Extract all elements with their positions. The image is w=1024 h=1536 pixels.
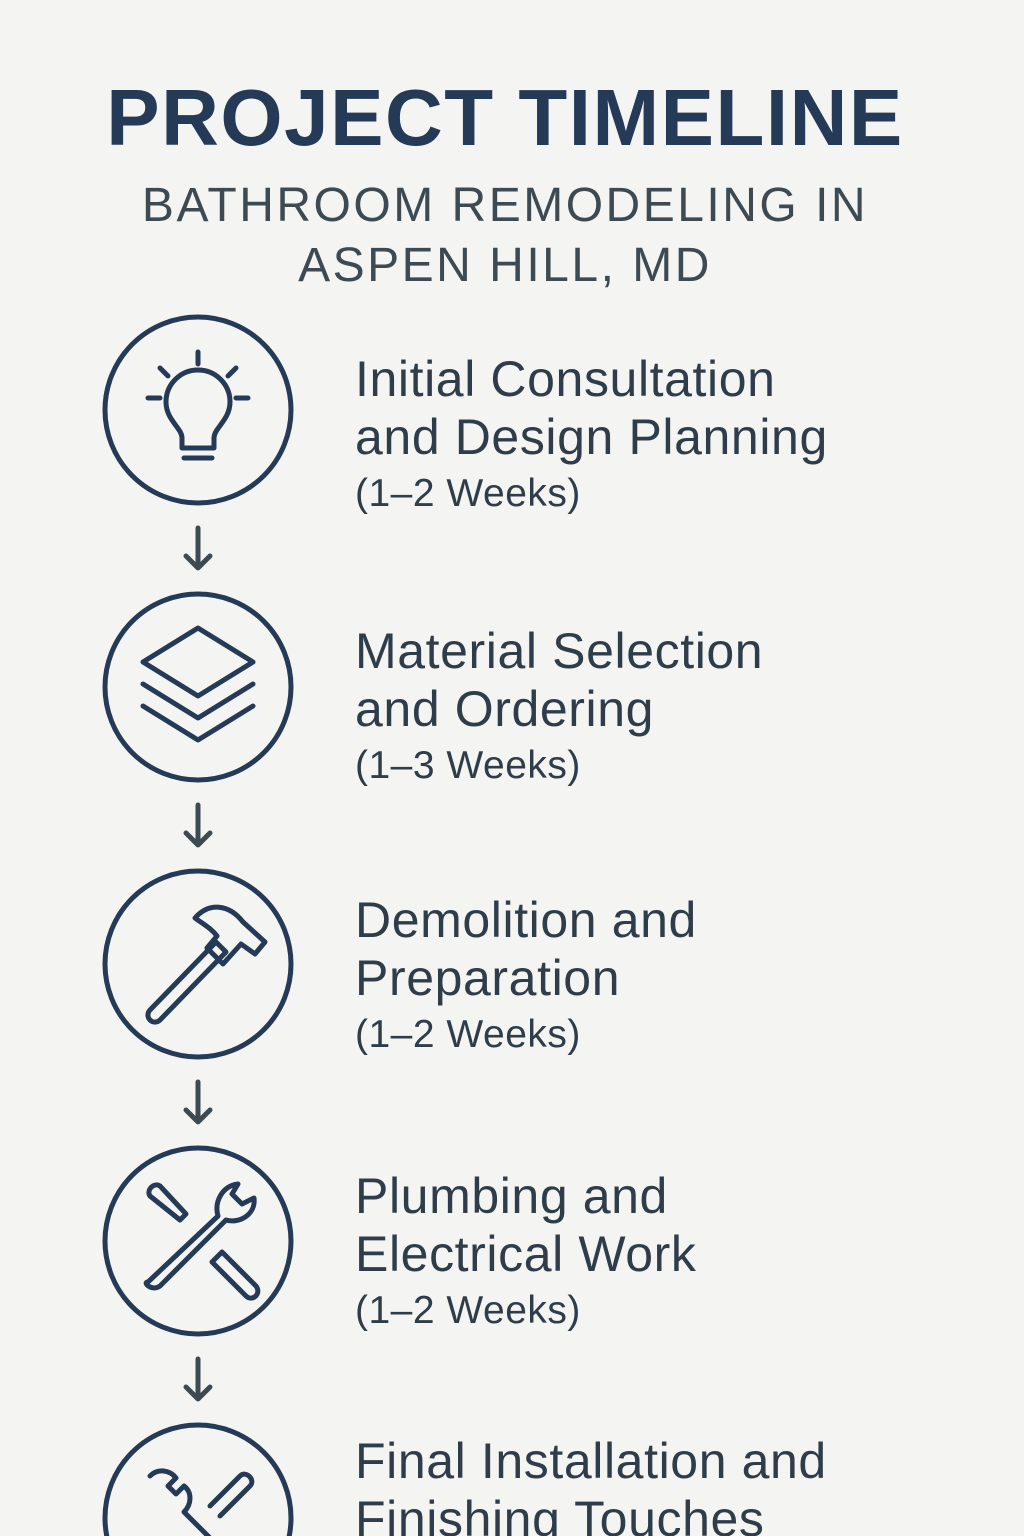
step 2 text: Material Selection (355, 623, 763, 679)
icon: layers (105, 594, 291, 780)
arrow 1 (186, 528, 210, 568)
step 3 text (355, 892, 697, 1056)
icon: tools (105, 1148, 291, 1334)
step 5 text (355, 1433, 827, 1536)
step 2 text: (1–3 Weeks) (355, 744, 581, 787)
step 1 text (355, 351, 828, 515)
step 2 text: and Ordering (355, 681, 654, 737)
step 1 text: (1–2 Weeks) (355, 472, 581, 515)
step 3 text: Demolition and (355, 892, 697, 948)
step 3 text: (1–2 Weeks) (355, 1013, 581, 1056)
step 1 text: Initial Consultation (355, 351, 776, 407)
step 1 text: and Design Planning (355, 409, 828, 465)
step 5 text: Final Installation and (355, 1433, 827, 1489)
step 4 text: Plumbing and (355, 1168, 668, 1224)
icon: tools 2 (105, 1425, 291, 1536)
title: PROJECT TIMELINE (106, 73, 904, 162)
arrow 4 (186, 1359, 210, 1399)
arrow 2 (186, 805, 210, 845)
icon: lightbulb (105, 317, 291, 503)
subtitle: BATHROOM REMODELING IN (142, 179, 868, 232)
step 2 text (355, 623, 763, 787)
arrow 3 (186, 1082, 210, 1122)
icon: hammer (105, 871, 291, 1057)
step 4 text: Electrical Work (355, 1226, 696, 1282)
subtitle (142, 179, 868, 292)
step 4 text: (1–2 Weeks) (355, 1289, 581, 1332)
step 3 text: Preparation (355, 950, 620, 1006)
subtitle: ASPEN HILL, MD (298, 239, 712, 292)
step 4 text (355, 1168, 696, 1332)
